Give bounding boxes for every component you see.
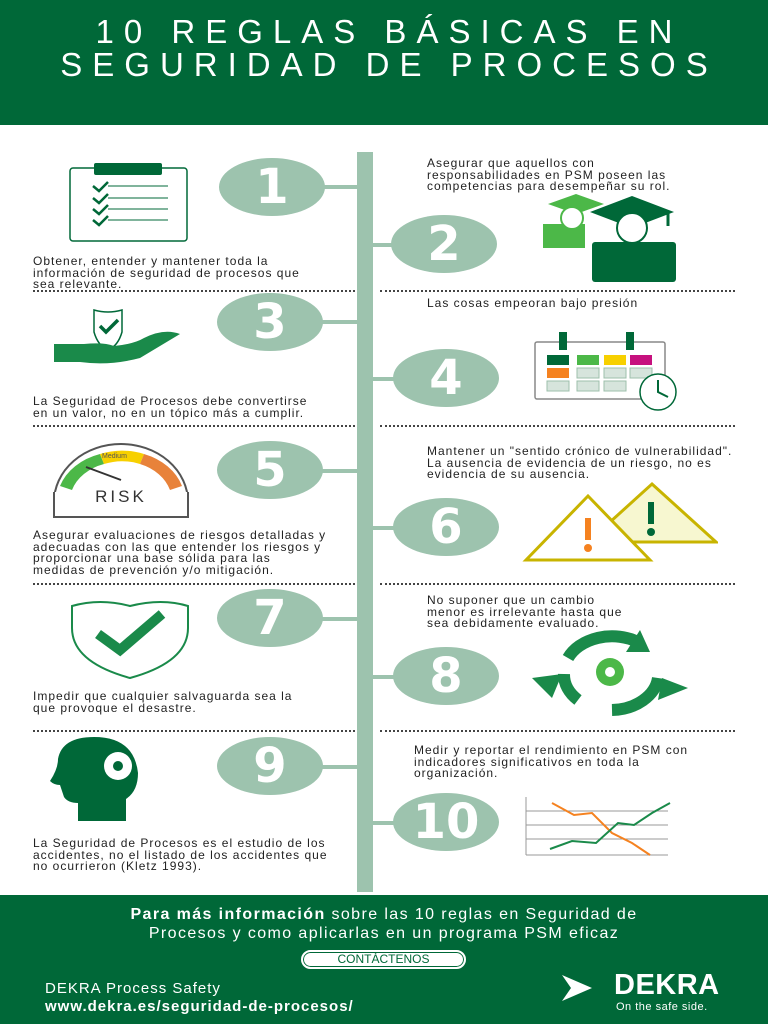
text 1: Obtener, entender y mantener toda la — [33, 254, 268, 268]
text 5 — [33, 528, 326, 576]
icon: hand with shield — [54, 309, 180, 364]
icon: head with gear — [50, 737, 138, 821]
text 5: proporcionar una base sólida para las — [33, 551, 271, 565]
text 2: competencias para desempeñar su rol. — [427, 179, 670, 193]
number 7 — [217, 589, 323, 647]
text 3: en un valor, no en un tópico más a cumplir. — [33, 406, 304, 420]
icon: risk gauge: Medium — [102, 453, 127, 460]
number 9: 9 — [253, 738, 287, 794]
text 10 — [414, 743, 688, 780]
icon: clipboard — [69, 163, 188, 242]
number 5 — [217, 441, 323, 499]
number 5: 5 — [253, 442, 287, 498]
number 7: 7 — [253, 590, 287, 646]
text 3: La Seguridad de Procesos debe convertirse — [33, 394, 307, 408]
text 1 — [33, 254, 300, 291]
timeline bar — [357, 152, 373, 892]
number 6 — [393, 498, 499, 556]
text 10: Medir y reportar el rendimiento en PSM con — [414, 743, 688, 757]
icon: line chart — [526, 797, 670, 856]
contact button — [301, 950, 466, 969]
contact info — [45, 980, 354, 1015]
header: SEGURIDAD DE PROCESOS — [60, 46, 718, 83]
icon: recycle gear — [532, 630, 688, 716]
number 4: 4 — [429, 350, 463, 406]
header — [0, 0, 768, 125]
text 5: adecuadas con las que entender los riesgos y — [33, 540, 321, 554]
number 2: 2 — [427, 216, 461, 272]
text 6 — [427, 444, 732, 481]
contact info: www.dekra.es/seguridad-de-procesos/ — [45, 998, 354, 1015]
icon: risk gauge — [53, 443, 189, 518]
footer — [0, 895, 768, 1024]
icon: warning triangles — [522, 482, 718, 562]
number 3 — [217, 293, 323, 351]
text 9: accidentes, no el listado de los accidentes que — [33, 848, 328, 862]
text 10: organización. — [414, 766, 498, 780]
text 5: Asegurar evaluaciones de riesgos detalladas y — [33, 528, 326, 542]
icon: calendar with clock — [534, 332, 677, 411]
text 5: medidas de prevención y/o mitigación. — [33, 562, 274, 576]
number 9 — [217, 737, 323, 795]
text 8: menor es irrelevante hasta que — [427, 604, 622, 618]
text 2: Asegurar que aquellos con — [427, 156, 595, 170]
number 6: 6 — [429, 499, 463, 555]
text 9 — [33, 836, 328, 873]
text 8: No suponer que un cambio — [427, 593, 595, 607]
text 9: no ocurrieron (Kletz 1993). — [33, 859, 202, 873]
number 10 — [393, 793, 499, 851]
text 1: sea relevante. — [33, 277, 122, 291]
text 7: que provoque el desastre. — [33, 700, 197, 714]
text 8: sea debidamente evaluado. — [427, 616, 599, 630]
DEKRA logo — [562, 969, 720, 1013]
icon: shield check — [71, 601, 189, 679]
DEKRA logo: On the safe side. — [616, 1001, 708, 1013]
text 7 — [33, 689, 292, 714]
number 2 — [391, 215, 497, 273]
footer text: Para más información sobre las 10 reglas en Seguridad de — [130, 906, 638, 923]
contact button: CONTÁCTENOS — [337, 952, 430, 966]
text 10: indicadores significativos en toda la — [414, 754, 640, 768]
footer text: Procesos y como aplicarlas en un programa PSM eficaz — [149, 925, 619, 942]
text 2: responsabilidades en PSM poseen las — [427, 168, 666, 182]
text 8 — [427, 593, 622, 630]
footer text — [130, 906, 638, 942]
contact info: DEKRA Process Safety — [45, 980, 221, 997]
header: 10 REGLAS BÁSICAS EN — [96, 13, 682, 50]
number 1 — [219, 158, 325, 216]
number 8 — [393, 647, 499, 705]
text 1: información de seguridad de procesos que — [33, 266, 300, 280]
text 4: Las cosas empeoran bajo presión — [427, 296, 638, 310]
icon: risk gauge: RISK — [95, 487, 147, 506]
text 9: La Seguridad de Procesos es el estudio de los — [33, 836, 326, 850]
DEKRA logo: DEKRA — [614, 969, 720, 1001]
text 6: La ausencia de evidencia de un riesgo, no es — [427, 456, 712, 470]
number 10: 10 — [413, 794, 479, 850]
number 8: 8 — [429, 648, 463, 704]
text 6: evidencia de su ausencia. — [427, 467, 590, 481]
text 3 — [33, 394, 307, 420]
number 1: 1 — [255, 159, 289, 215]
text 6: Mantener un "sentido crónico de vulnerabilidad". — [427, 444, 732, 458]
number 4 — [393, 349, 499, 407]
icon: graduates — [543, 194, 676, 282]
number 3: 3 — [253, 294, 287, 350]
text 7: Impedir que cualquier salvaguarda sea la — [33, 689, 292, 703]
text 2 — [427, 156, 670, 193]
